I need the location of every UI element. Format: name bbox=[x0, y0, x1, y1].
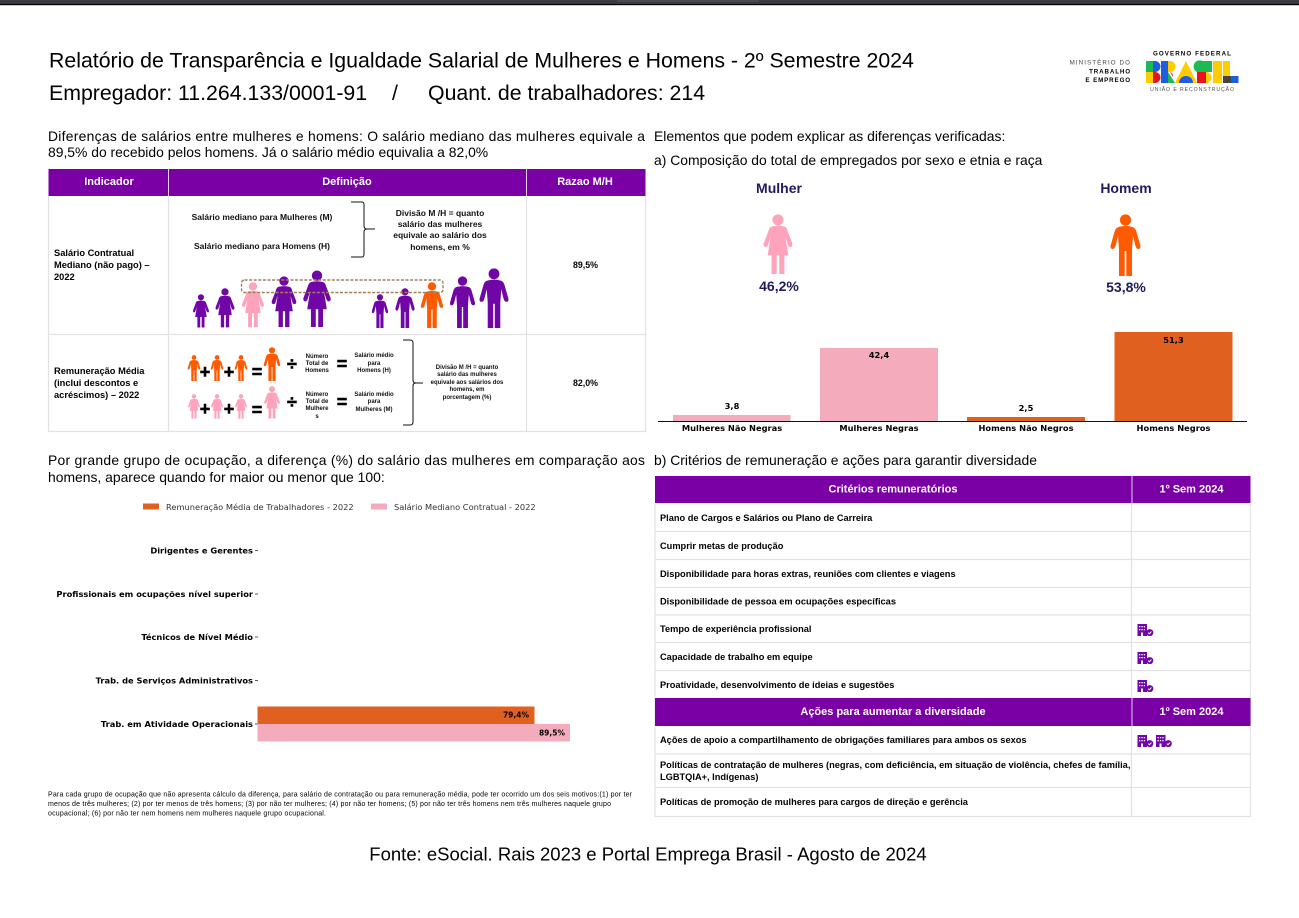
table header bbox=[48, 169, 646, 196]
panel: homem share bbox=[1100, 180, 1152, 295]
diversity rows: LGBTQIA+, Indígenas) bbox=[660, 772, 758, 782]
diversity table header: Ações para aumentar a diversidade bbox=[800, 706, 986, 718]
heading: explanatory elements: Elementos que podem explicar as diferenças verificadas: bbox=[654, 128, 1005, 144]
row 2 male formula: para bbox=[368, 361, 381, 367]
row 2 male formula: = bbox=[252, 362, 262, 382]
criteria table header: 1º Sem 2024 bbox=[1160, 484, 1224, 496]
row 2 female formula: Total de bbox=[306, 399, 329, 405]
diversity table header bbox=[655, 698, 1250, 726]
footnote: Para cada grupo de ocupação que não apresenta cálculo da diferença, para salário de contratação ou para remuneração média, pode ter ocorrido um dos seis motivos:(1) por ter bbox=[48, 792, 633, 798]
diversity rows: Políticas de promoção de mulheres para cargos de direção e gerência bbox=[660, 797, 969, 807]
logo: governo federal brasil: UNIÃO E RECONSTRUÇÃO bbox=[1150, 86, 1235, 93]
heading: occupation group bbox=[48, 452, 645, 485]
criteria rows: Plano de Cargos e Salários ou Plano de Carreira bbox=[660, 513, 873, 523]
heading: occupation group: Por grande grupo de ocupação, a diferença (%) do salário das mulheres em comparação aos bbox=[48, 452, 645, 468]
text: salary difference intro: 89,5% do recebido pelos homens. Já o salário médio equivalia a 82,0% bbox=[48, 144, 488, 160]
text: salary difference intro bbox=[48, 128, 645, 160]
row 1 definition text: Divisão M /H = quanto bbox=[396, 208, 484, 218]
bar: mulheres não negras bbox=[673, 401, 790, 433]
row 2 brace and division note: Divisão M /H = quanto bbox=[436, 365, 499, 371]
chart legend bbox=[143, 502, 536, 512]
row 1 ratio: 89,5% bbox=[573, 260, 598, 270]
criteria rows bbox=[660, 513, 956, 690]
criteria rows: Tempo de experiência profissional bbox=[660, 624, 811, 634]
row 1 definition text: salário das mulheres bbox=[398, 219, 483, 229]
row 2 female formula bbox=[188, 386, 394, 420]
logo: ministério do trabalho e emprego: E EMPREGO bbox=[1085, 77, 1131, 84]
chart: occupation bars bbox=[56, 502, 570, 742]
row 2 label bbox=[54, 366, 145, 400]
criteria table header bbox=[655, 476, 1250, 503]
table header: Indicador bbox=[84, 176, 134, 188]
row 2 male formula: + bbox=[200, 362, 210, 382]
criteria rows: Disponibilidade para horas extras, reuniões com clientes e viagens bbox=[660, 569, 956, 579]
panel: homem share: Homem bbox=[1100, 180, 1152, 196]
row 2 male formula: Total de bbox=[306, 361, 329, 367]
row 2 brace and division note: porcentagem (%) bbox=[443, 395, 491, 401]
criteria rows: Disponibilidade de pessoa em ocupações específicas bbox=[660, 596, 896, 606]
text: salary difference intro: Diferenças de salários entre mulheres e homens: O salário mediano das mulheres equivale a bbox=[48, 128, 645, 144]
title bbox=[49, 48, 914, 105]
table header: Definição bbox=[322, 176, 372, 188]
bar: remuneração média 79,4%: 79,4% bbox=[503, 710, 529, 720]
heading: remuneration criteria: b) Critérios de remuneração e ações para garantir diversidade bbox=[654, 452, 1037, 468]
row 2 female formula: Mulheres (M) bbox=[355, 407, 393, 413]
bar: homens negros: 51,3 bbox=[1163, 335, 1184, 345]
title: Relatório de Transparência e Igualdade Salarial de Mulheres e Homens - 2º Semestre 2024 bbox=[49, 48, 914, 72]
title: Quant. de trabalhadores: 214 bbox=[428, 81, 705, 105]
panel: mulher share: Mulher bbox=[756, 180, 802, 196]
bar: mulheres negras: Mulheres Negras bbox=[839, 423, 919, 433]
heading: explanatory elements: a) Composição do total de empregados por sexo e etnia e raça bbox=[654, 152, 1043, 168]
criteria rows: Proatividade, desenvolvimento de ideias e sugestões bbox=[660, 680, 894, 690]
row 2 label: Remuneração Média bbox=[54, 366, 145, 376]
bar: mulheres não negras: Mulheres Não Negras bbox=[682, 423, 782, 433]
panel: homem share: 53,8% bbox=[1106, 279, 1146, 295]
bar: mulheres não negras: 3,8 bbox=[725, 401, 740, 411]
criteria table header: Critérios remuneratórios bbox=[829, 484, 957, 496]
row 2 male formula: = bbox=[337, 354, 347, 374]
bar: homens negros: Homens Negros bbox=[1137, 423, 1211, 433]
icons: criteria checks bbox=[1138, 624, 1153, 692]
icon: woman bbox=[764, 214, 792, 274]
diversity rows bbox=[660, 735, 1130, 807]
chart category labels: Profissionais em ocupações nível superior bbox=[56, 589, 254, 599]
row 2 female formula: Mulhere bbox=[305, 406, 329, 412]
bar: homens não negros bbox=[967, 403, 1085, 433]
chart category labels bbox=[56, 546, 258, 729]
source line: Fonte: eSocial. Rais 2023 e Portal Emprega Brasil - Agosto de 2024 bbox=[369, 844, 927, 864]
row 2 male formula: Número bbox=[306, 354, 329, 360]
title: / bbox=[392, 81, 398, 105]
logo: ministério do trabalho e emprego bbox=[1070, 60, 1131, 84]
footnote bbox=[48, 792, 633, 818]
row 2 female formula: Número bbox=[306, 392, 329, 398]
row 1 label: 2022 bbox=[54, 272, 75, 282]
row 2 female formula: = bbox=[252, 400, 262, 420]
chart category labels: Trab. de Serviços Administrativos bbox=[96, 676, 253, 686]
title: Empregador: 11.264.133/0001-91 bbox=[49, 81, 367, 105]
median highlight box bbox=[242, 280, 443, 292]
panel: indicator table bbox=[48, 169, 646, 432]
icon: row of women bbox=[193, 270, 331, 327]
logo: governo federal brasil: GOVERNO FEDERAL bbox=[1153, 50, 1232, 58]
footnote: menos de três mulheres; (2) por ter menos de três homens; (3) por não ter mulheres; (4) por não ter homens; (5) por não ter três homens nem três mulheres naquele grupo bbox=[48, 801, 611, 808]
panel: criteria table bbox=[655, 476, 1250, 816]
logo: governo federal brasil bbox=[1146, 50, 1238, 93]
chart legend: Remuneração Média de Trabalhadores - 2022 bbox=[166, 502, 354, 512]
icon: row of men bbox=[372, 268, 508, 328]
bar chart: sex and race composition bbox=[658, 332, 1247, 433]
diversity rows: Políticas de contratação de mulheres (negras, com deficiência, em situação de violência, chefes de família, bbox=[660, 760, 1130, 770]
row 2 female formula: ÷ bbox=[287, 392, 297, 412]
icon: man bbox=[1110, 214, 1140, 276]
logo: ministério do trabalho e emprego: MINISTÉRIO DO bbox=[1070, 60, 1131, 66]
row 2 male formula: ÷ bbox=[287, 354, 297, 374]
chart category labels: Dirigentes e Gerentes bbox=[150, 546, 253, 556]
row 1 definition text bbox=[192, 202, 487, 257]
row 1 definition text: homens, em % bbox=[410, 242, 470, 252]
top window bar bbox=[0, 0, 1299, 5]
row 1 definition text: equivale ao salário dos bbox=[393, 230, 487, 240]
row 2 male formula: Homens (H) bbox=[357, 368, 391, 374]
row 2 female formula: s bbox=[315, 414, 319, 420]
criteria rows: Cumprir metas de produção bbox=[660, 541, 784, 551]
table header: Razao M/H bbox=[557, 176, 613, 188]
row 2 brace and division note: equivale aos salários dos bbox=[431, 380, 504, 386]
row 2 male formula: Homens bbox=[305, 368, 329, 374]
row 1 label: Salário Contratual bbox=[54, 248, 134, 258]
row 2 brace and division note bbox=[403, 340, 504, 425]
diversity rows: Ações de apoio a compartilhamento de obrigações familiares para ambos os sexos bbox=[660, 735, 1027, 745]
row 2 female formula: Salário médio bbox=[354, 392, 394, 398]
chart category labels: Trab. em Atividade Operacionais bbox=[101, 719, 253, 729]
row 2 female formula: + bbox=[224, 399, 234, 419]
criteria rows: Capacidade de trabalho em equipe bbox=[660, 652, 813, 662]
row 2 female formula: = bbox=[337, 392, 347, 412]
heading: explanatory elements bbox=[654, 128, 1043, 168]
bar: homens negros bbox=[1114, 332, 1232, 433]
footnote: ocupacional; (6) por não ter nem homens nem mulheres naquele grupo ocupacional. bbox=[48, 810, 326, 818]
bar: remuneração média 79,4% bbox=[258, 706, 534, 724]
bar: mulheres negras: 42,4 bbox=[869, 350, 889, 360]
row 2 brace and division note: salário das mulheres bbox=[437, 372, 498, 378]
row 2 male formula bbox=[188, 347, 394, 382]
row 2 ratio: 82,0% bbox=[573, 378, 598, 388]
icons: diversity checks bbox=[1138, 735, 1172, 747]
row 1 label: Mediano (não pago) – bbox=[54, 260, 150, 270]
row 2 label: acréscimos) – 2022 bbox=[54, 390, 139, 400]
logo: ministério do trabalho e emprego: TRABALHO bbox=[1089, 68, 1131, 76]
bar: salário mediano 89,5% bbox=[258, 724, 570, 742]
chart legend: Salário Mediano Contratual - 2022 bbox=[394, 502, 536, 512]
row 2 male formula: + bbox=[224, 362, 234, 382]
bar: mulheres negras bbox=[820, 348, 938, 433]
panel: mulher share: 46,2% bbox=[759, 278, 799, 294]
bar: homens não negros: Homens Não Negros bbox=[978, 423, 1074, 433]
chart category labels: Técnicos de Nível Médio bbox=[141, 632, 253, 642]
row 1 label bbox=[54, 248, 150, 282]
row 1 definition text: Salário mediano para Homens (H) bbox=[194, 241, 330, 251]
row 2 label: (inclui descontos e bbox=[54, 378, 138, 388]
bar: homens não negros: 2,5 bbox=[1019, 403, 1034, 413]
heading: occupation group: homens, aparece quando for maior ou menor que 100: bbox=[48, 469, 385, 485]
row 2 male formula: Salário médio bbox=[354, 353, 394, 359]
row 2 brace and division note: homens, em bbox=[449, 387, 485, 393]
row 2 female formula: para bbox=[368, 399, 381, 405]
bar: salário mediano 89,5%: 89,5% bbox=[539, 728, 565, 738]
row 1 definition text: Salário mediano para Mulheres (M) bbox=[192, 212, 333, 222]
panel: mulher share bbox=[756, 180, 802, 294]
row 2 female formula: + bbox=[200, 399, 210, 419]
diversity table header: 1º Sem 2024 bbox=[1160, 706, 1224, 718]
